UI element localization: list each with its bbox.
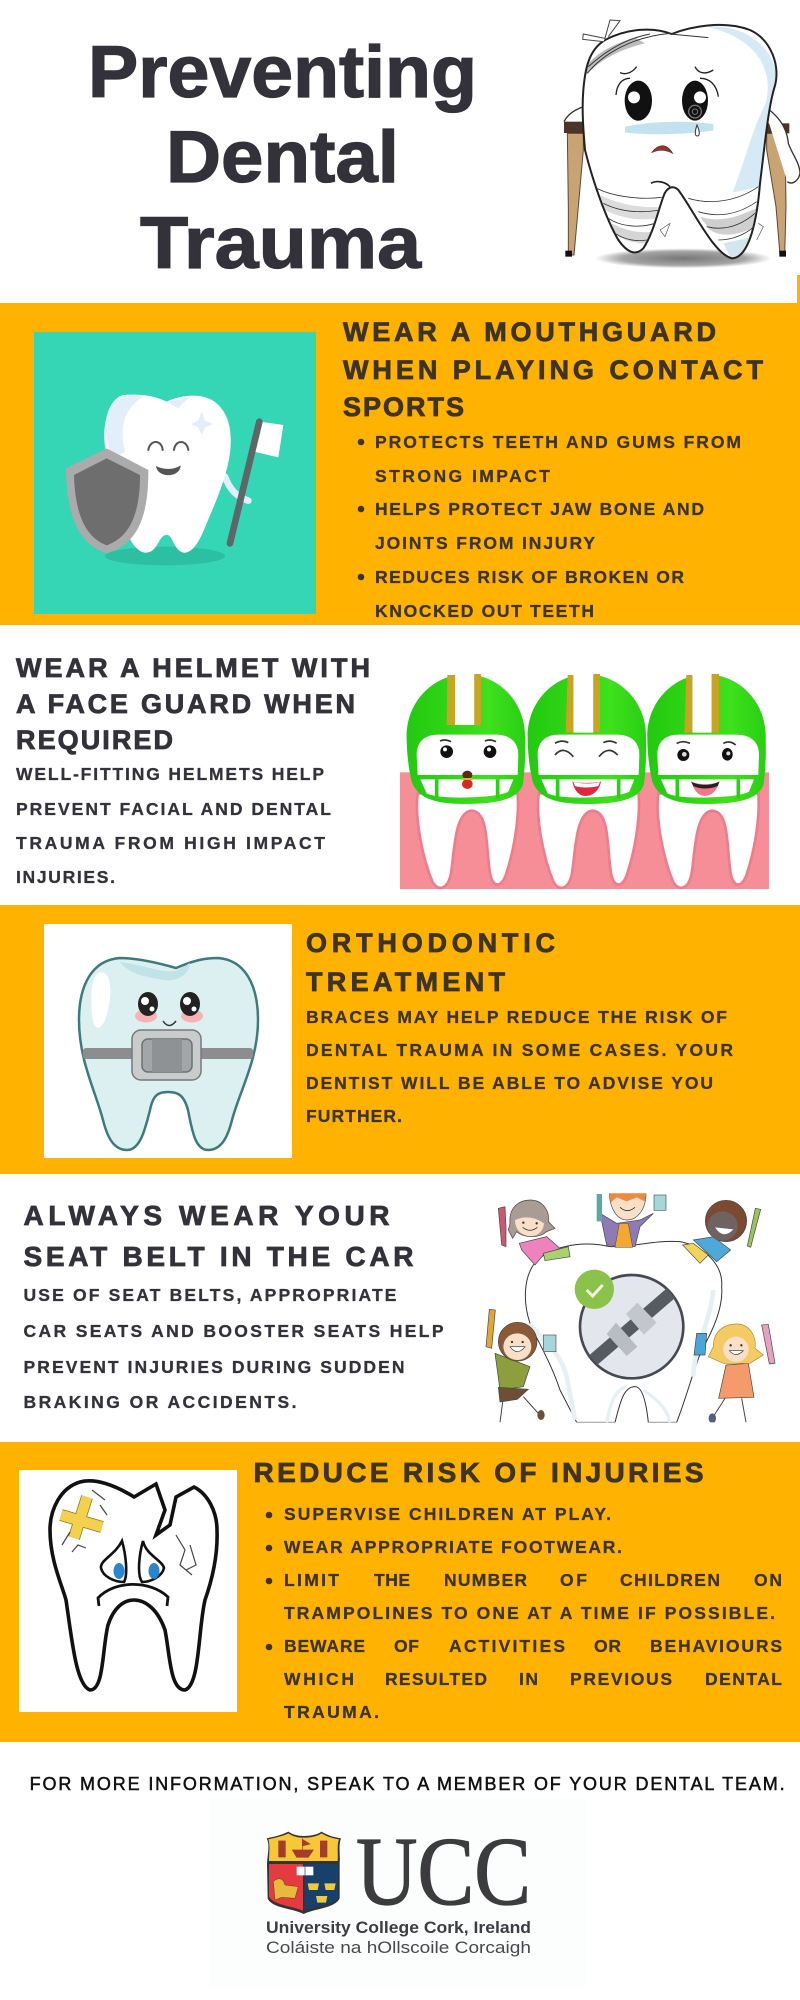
heading: seat belt: [24, 1200, 414, 1272]
text: seat belt advice: [24, 1285, 444, 1412]
logo: University College Cork: [209, 1798, 587, 1987]
panel: reduce risk of injuries: [0, 1442, 800, 1742]
bullet list: mouthguard benefits: HELPS PROTECT JAW BONE AND: [375, 499, 704, 519]
text: braces advice: BRACES MAY HELP REDUCE THE RISK OF: [306, 1007, 727, 1027]
panel: seat belt: [24, 1193, 775, 1423]
bullet list: injury prevention: SUPERVISE CHILDREN AT PLAY.: [284, 1504, 611, 1524]
heading: mouthguard: WHEN PLAYING CONTACT: [343, 355, 764, 385]
heading: reduce risk: REDUCE RISK OF INJURIES: [254, 1457, 704, 1488]
bullet list: injury prevention: RESULTED: [385, 1669, 487, 1689]
heading: seat belt: ALWAYS WEAR YOUR: [24, 1200, 390, 1231]
bullet list: mouthguard benefits: REDUCES RISK OF BROKEN OR: [375, 567, 684, 587]
child: top centre: [597, 1193, 666, 1247]
text: UCC: UCC: [356, 1818, 531, 1925]
panel: orthodontic treatment: [0, 905, 800, 1174]
corner mark: [797, 275, 800, 303]
panel: helmet: [16, 653, 769, 889]
bullet list: injury prevention: WEAR APPROPRIATE FOOTWEAR.: [284, 1537, 622, 1557]
panel: mouthguard: [0, 303, 800, 625]
icon: UCC crest: [267, 1832, 341, 1914]
illustration: three teeth in green helmets: [400, 674, 769, 889]
text: braces advice: FURTHER.: [306, 1106, 402, 1126]
bullet list: injury prevention: TRAUMA.: [284, 1702, 379, 1722]
heading: mouthguard: WEAR A MOUTHGUARD: [343, 317, 716, 347]
text: helmet advice: PREVENT FACIAL AND DENTAL: [16, 799, 331, 819]
heading: helmet: [16, 653, 370, 755]
footer note: FOR MORE INFORMATION, SPEAK TO A MEMBER OF YOUR DENTAL TEAM.: [30, 1774, 785, 1794]
bullet list: injury prevention: OR: [594, 1636, 621, 1656]
title: Preventing: [88, 32, 477, 113]
heading: orthodontic treatment: TREATMENT: [306, 967, 506, 997]
bullet list: injury prevention: BEHAVIOURS: [650, 1636, 782, 1656]
text: helmet advice: INJURIES.: [16, 867, 115, 887]
bullet list: injury prevention: [266, 1504, 782, 1722]
bullet list: mouthguard benefits: JOINTS FROM INJURY: [375, 533, 595, 553]
bullet list: injury prevention: BEWARE: [284, 1636, 365, 1656]
illustration: children around tooth with seat belt: [486, 1193, 775, 1423]
bullet list: mouthguard benefits: PROTECTS TEETH AND GUMS FROM: [375, 432, 741, 452]
bullet list: injury prevention: ACTIVITIES: [449, 1636, 565, 1656]
icon: cracked sad tooth: [19, 1470, 237, 1712]
child: bottom right: [694, 1324, 775, 1423]
icon: tooth with brace: [44, 924, 292, 1158]
text: seat belt advice: CAR SEATS AND BOOSTER SEATS HELP: [24, 1321, 444, 1341]
text: Irish name: Coláiste na hOllscoile Corcaigh: [266, 1938, 531, 1957]
title: Dental: [166, 117, 399, 198]
title: [88, 32, 477, 284]
text: braces advice: [306, 1007, 733, 1126]
bullet list: injury prevention: CHILDREN: [620, 1570, 720, 1590]
text: braces advice: DENTIST WILL BE ABLE TO ADVISE YOU: [306, 1073, 713, 1093]
bullet list: injury prevention: THE: [374, 1570, 410, 1590]
heading: helmet: A FACE GUARD WHEN: [16, 689, 355, 719]
text: braces advice: DENTAL TRAUMA IN SOME CASES. YOUR: [306, 1040, 733, 1060]
heading: seat belt: SEAT BELT IN THE CAR: [24, 1241, 414, 1272]
heading: helmet: WEAR A HELMET WITH: [16, 653, 370, 683]
bullet list: mouthguard benefits: [358, 432, 741, 621]
child: top left: [498, 1200, 570, 1265]
bullet list: mouthguard benefits: KNOCKED OUT TEETH: [375, 601, 594, 621]
text: helmet advice: [16, 764, 331, 887]
text: seat belt advice: BRAKING OR ACCIDENTS.: [24, 1392, 296, 1412]
bullet list: injury prevention: NUMBER: [444, 1570, 527, 1590]
bullet list: injury prevention: LIMIT: [284, 1570, 339, 1590]
heading: orthodontic treatment: ORTHODONTIC: [306, 928, 555, 958]
child: top right: [683, 1200, 761, 1263]
bullet list: injury prevention: IN: [519, 1669, 538, 1689]
bullet list: injury prevention: DENTAL: [705, 1669, 782, 1689]
bullet list: mouthguard benefits: STRONG IMPACT: [375, 466, 550, 486]
text: seat belt advice: USE OF SEAT BELTS, APPROPRIATE: [24, 1285, 396, 1305]
text: university name: University College Cork, Ireland: [266, 1918, 531, 1937]
bullet list: injury prevention: OF: [394, 1636, 419, 1656]
heading: mouthguard: [343, 317, 764, 422]
heading: helmet: REQUIRED: [16, 725, 173, 755]
bullet list: injury prevention: ON: [754, 1570, 782, 1590]
icon: tooth with shield and toothbrush: [34, 332, 316, 614]
illustration: bandaged tooth on crutches: [564, 20, 800, 268]
bullet list: injury prevention: OF: [560, 1570, 587, 1590]
heading: orthodontic treatment: [306, 928, 555, 997]
bullet list: injury prevention: TRAMPOLINES TO ONE AT A TIME IF POSSIBLE.: [284, 1603, 775, 1623]
text: seat belt advice: PREVENT INJURIES DURING SUDDEN: [24, 1357, 405, 1377]
bullet list: injury prevention: WHICH: [284, 1669, 354, 1689]
text: helmet advice: WELL-FITTING HELMETS HELP: [16, 764, 324, 784]
title: Trauma: [140, 203, 423, 284]
bullet list: injury prevention: PREVIOUS: [570, 1669, 672, 1689]
text: helmet advice: TRAUMA FROM HIGH IMPACT: [16, 833, 325, 853]
child: bottom left: [486, 1309, 556, 1422]
heading: mouthguard: SPORTS: [343, 392, 464, 422]
